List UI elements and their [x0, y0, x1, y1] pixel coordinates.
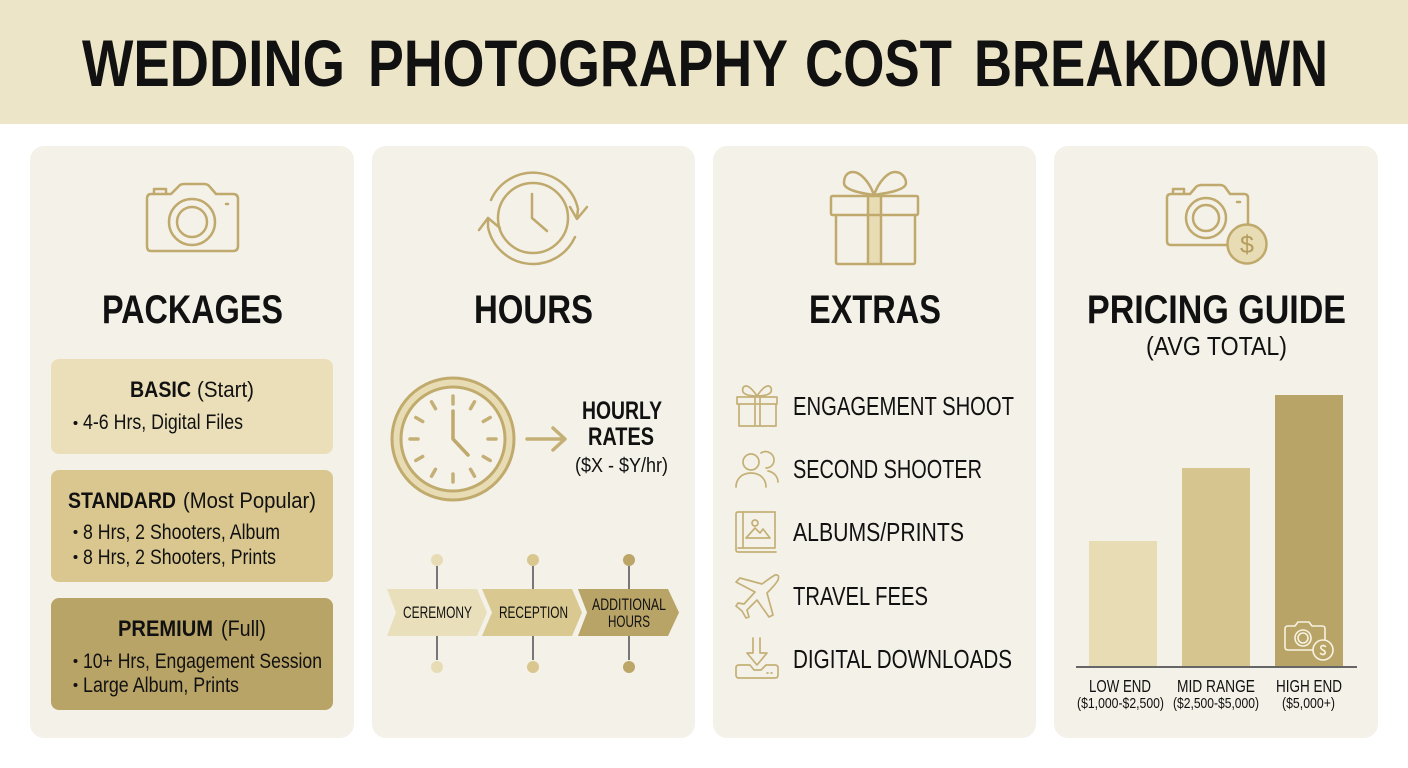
arrow to hourly rates	[527, 428, 565, 450]
timeline: reception stage: RECEPTION	[499, 603, 568, 622]
heading: hours: HOURS	[474, 288, 593, 332]
icon: large wall clock	[392, 378, 514, 500]
label: high end: ($5,000+)	[1282, 695, 1335, 712]
list item: travel fees	[736, 575, 928, 618]
label: low end	[1077, 676, 1164, 712]
card: basic package: 4-6 Hrs, Digital Files	[83, 411, 243, 434]
icon: camera with coin	[1167, 185, 1266, 264]
icon: clock with circular arrows	[479, 173, 587, 264]
timeline: ceremony stage	[387, 554, 487, 673]
heading: pricing guide: PRICING GUIDE	[1087, 288, 1346, 332]
label: low end: LOW END	[1089, 676, 1151, 696]
list item: albums and prints: ALBUMS/PRINTS	[793, 517, 964, 547]
icon: camera with coin: $	[1240, 231, 1254, 259]
list item: travel fees: TRAVEL FEES	[793, 581, 928, 611]
card: premium package: Large Album, Prints	[83, 674, 239, 697]
header banner with title: PHOTOGRAPHY	[368, 26, 788, 100]
text: hourly rates: ($X - $Y/hr)	[575, 455, 668, 477]
label: mid range	[1173, 676, 1259, 712]
panel: extras	[713, 146, 1036, 738]
chart axis	[1076, 666, 1357, 668]
header banner with title	[0, 0, 1408, 124]
list item: second shooter: SECOND SHOOTER	[793, 454, 982, 484]
list item: digital downloads: DIGITAL DOWNLOADS	[793, 644, 1012, 674]
list item: engagement shoot	[737, 386, 1014, 426]
text: hourly rates: HOURLY	[582, 397, 662, 425]
panel: hours	[372, 146, 695, 738]
heading: packages: PACKAGES	[102, 288, 283, 332]
list item: albums and prints	[736, 512, 964, 552]
card: basic package: (Start)	[197, 377, 254, 402]
card: premium package: (Full)	[221, 616, 266, 641]
card: standard package: 8 Hrs, 2 Shooters, Album	[83, 521, 280, 544]
bar: high end	[1275, 395, 1343, 666]
card: basic package: BASIC	[130, 377, 191, 402]
card: premium package: 10+ Hrs, Engagement Session	[83, 650, 322, 673]
card: standard package: STANDARD	[68, 488, 176, 513]
heading: extras: EXTRAS	[809, 288, 941, 332]
list item: digital downloads	[736, 638, 1012, 678]
timeline: additional hours stage	[578, 554, 679, 673]
panel: pricing guide	[1054, 146, 1378, 738]
timeline: ceremony stage: CEREMONY	[403, 603, 472, 622]
timeline: additional hours stage: HOURS	[608, 612, 650, 631]
heading: pricing guide: (AVG TOTAL)	[1146, 331, 1287, 361]
heading: pricing guide	[1087, 288, 1346, 361]
text: hourly rates	[575, 397, 668, 477]
card: standard package: (Most Popular)	[183, 488, 316, 513]
label: high end: HIGH END	[1276, 676, 1342, 696]
icon: gift box	[831, 172, 918, 264]
header banner with title: BREAKDOWN	[974, 26, 1328, 100]
label: mid range: ($2,500-$5,000)	[1173, 695, 1259, 712]
icon: camera	[147, 184, 238, 251]
label: mid range: MID RANGE	[1177, 676, 1255, 696]
bar: low end	[1089, 541, 1157, 666]
label: high end	[1276, 676, 1342, 712]
label: low end: ($1,000-$2,500)	[1077, 695, 1164, 712]
text: hourly rates: RATES	[588, 423, 654, 451]
icon: camera with coin on high end bar	[1285, 622, 1333, 660]
timeline: additional hours stage: ADDITIONAL	[592, 595, 666, 614]
header banner with title: COST	[805, 26, 952, 100]
bar chart: average total price	[1076, 395, 1357, 712]
card: premium package	[51, 598, 333, 710]
bar: mid range	[1182, 468, 1250, 666]
card: premium package: PREMIUM	[118, 616, 213, 641]
list item: second shooter	[736, 452, 982, 487]
panel: packages	[30, 146, 354, 738]
list item: engagement shoot: ENGAGEMENT SHOOT	[793, 391, 1014, 421]
header banner with title: WEDDING	[82, 26, 345, 100]
card: standard package: 8 Hrs, 2 Shooters, Prints	[83, 546, 276, 569]
timeline: reception stage	[482, 554, 582, 673]
card: basic package	[51, 359, 333, 454]
card: standard package	[51, 470, 333, 582]
